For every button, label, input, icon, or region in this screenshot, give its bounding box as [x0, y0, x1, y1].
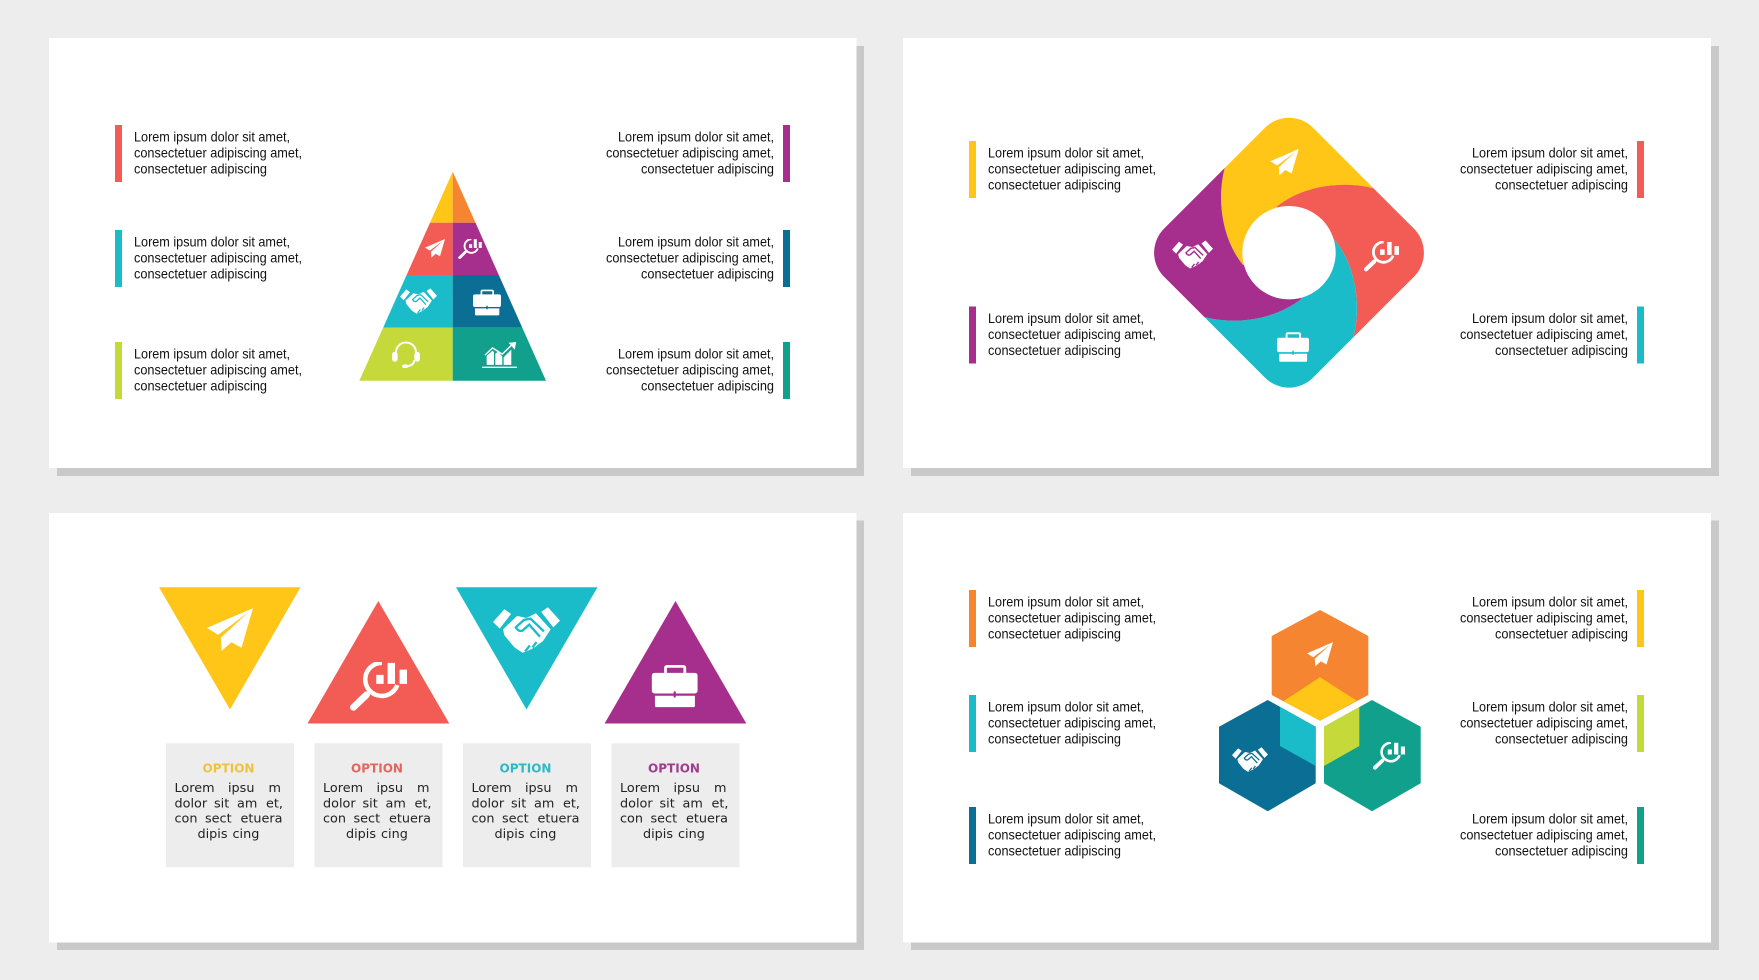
option card 2: [314, 743, 442, 867]
option card 3: cing: [530, 827, 556, 842]
text block: right 1: consectetuer adipiscing amet,: [1460, 162, 1628, 177]
text block: left 1: Lorem ipsum dolor sit amet,: [988, 146, 1144, 161]
option card 3: ipsu: [525, 781, 551, 796]
option card 1: dipis: [198, 827, 228, 842]
text block: left 2: Lorem ipsum dolor sit amet,: [134, 235, 290, 250]
text block: right 1: Lorem ipsum dolor sit amet,: [618, 130, 774, 145]
option card 4: ipsu: [674, 781, 700, 796]
option card 4: m: [714, 781, 726, 796]
option card 3: m: [566, 781, 578, 796]
option card 2: etuera: [389, 811, 431, 826]
text block: right 3: Lorem ipsum dolor sit amet,: [618, 347, 774, 362]
text block: right 2: consectetuer adipiscing amet,: [1460, 327, 1628, 342]
text block: left 2: [969, 695, 1156, 752]
text block: left 2: consectetuer adipiscing amet,: [134, 251, 302, 266]
text block: right 2: consectetuer adipiscing: [641, 267, 774, 282]
text block: left 3: Lorem ipsum dolor sit amet,: [988, 812, 1144, 827]
text block: right 1: Lorem ipsum dolor sit amet,: [1472, 595, 1628, 610]
option card 3: et,: [563, 796, 580, 811]
option card 4: am: [682, 796, 703, 811]
option card 1: [166, 743, 294, 867]
option card 4: OPTION: [648, 761, 700, 775]
option card 4: Lorem: [620, 781, 660, 796]
option card 2: cing: [381, 827, 408, 842]
text block: left 2: Lorem ipsum dolor sit amet,: [988, 311, 1144, 326]
text block: left 1: consectetuer adipiscing: [988, 627, 1121, 642]
option card 1: ipsu: [228, 781, 254, 796]
panel: swirl diamond: [903, 38, 1719, 476]
option card 1: sect: [205, 811, 232, 826]
option card 2: sit: [362, 796, 378, 811]
option card 2: OPTION: [351, 761, 403, 775]
option card 3: sit: [511, 796, 526, 811]
text block: left 2: Lorem ipsum dolor sit amet,: [988, 700, 1144, 715]
text block: right 3: consectetuer adipiscing: [1495, 844, 1628, 859]
swirl diamond chart: [1154, 118, 1424, 388]
option card 1: m: [268, 781, 281, 796]
text block: left 3: Lorem ipsum dolor sit amet,: [134, 347, 290, 362]
text block: right 3: [1460, 807, 1644, 864]
triangle: teal: [456, 587, 598, 710]
text block: right 1: consectetuer adipiscing amet,: [1460, 611, 1628, 626]
option card 1: OPTION: [203, 761, 254, 775]
text block: right 2: [1460, 695, 1644, 752]
text block: left 1: Lorem ipsum dolor sit amet,: [988, 595, 1144, 610]
text block: right 1: consectetuer adipiscing: [641, 162, 774, 177]
text block: right 3: Lorem ipsum dolor sit amet,: [1472, 812, 1628, 827]
text block: left 2: consectetuer adipiscing amet,: [988, 327, 1156, 342]
option card 1: dolor: [174, 796, 208, 811]
text block: right 3: consectetuer adipiscing: [641, 379, 774, 394]
option card 3: sect: [502, 811, 529, 826]
text block: left 2: consectetuer adipiscing: [988, 343, 1121, 358]
option card 4: dolor: [620, 796, 653, 811]
pyramid chart: [359, 172, 546, 381]
text block: left 1: consectetuer adipiscing amet,: [134, 146, 302, 161]
text block: left 2: [115, 230, 302, 287]
triangle: yellow: [159, 587, 300, 710]
text block: left 1: [969, 590, 1156, 647]
option card 2: et,: [414, 796, 431, 811]
text block: right 2: Lorem ipsum dolor sit amet,: [618, 235, 774, 250]
text block: left 3: consectetuer adipiscing: [134, 379, 267, 394]
text block: right 3: consectetuer adipiscing amet,: [606, 363, 774, 378]
text block: right 2: consectetuer adipiscing: [1495, 732, 1628, 747]
option card 4: et,: [712, 796, 728, 811]
option card 3: dipis: [494, 827, 525, 842]
option card 1: cing: [232, 827, 259, 842]
text block: right 2: Lorem ipsum dolor sit amet,: [1472, 311, 1628, 326]
text block: left 2: consectetuer adipiscing: [988, 732, 1121, 747]
option card 3: etuera: [538, 811, 579, 826]
option card 3: OPTION: [500, 761, 551, 775]
text block: right 1: [606, 125, 790, 182]
option card 2: am: [386, 796, 406, 811]
option card 2: ipsu: [376, 781, 403, 796]
option card 3: am: [534, 796, 554, 811]
option card 2: sect: [354, 811, 380, 826]
text block: right 2: consectetuer adipiscing amet,: [1460, 716, 1628, 731]
text block: left 1: Lorem ipsum dolor sit amet,: [134, 130, 290, 145]
triangle: red: [308, 601, 449, 724]
text block: left 3: consectetuer adipiscing amet,: [134, 363, 302, 378]
option card 4: [612, 743, 740, 867]
option card 3: Lorem: [472, 781, 512, 796]
option card 2: Lorem: [323, 781, 363, 796]
option card 1: et,: [266, 796, 283, 811]
text block: left 1: consectetuer adipiscing: [134, 162, 267, 177]
text block: left 2: consectetuer adipiscing amet,: [988, 716, 1156, 731]
text block: left 2: [969, 306, 1156, 364]
option card 3: [463, 743, 591, 867]
text block: right 2: consectetuer adipiscing amet,: [606, 251, 774, 266]
text block: right 1: [1460, 141, 1644, 198]
panel: pyramid: [49, 38, 864, 476]
text block: right 2: consectetuer adipiscing: [1495, 343, 1628, 358]
option card 4: con: [620, 811, 643, 826]
panel: hexagons: [903, 513, 1719, 950]
text block: right 1: [1460, 590, 1644, 647]
text block: left 3: [969, 807, 1156, 864]
text block: right 2: [606, 230, 790, 287]
text block: right 1: consectetuer adipiscing: [1495, 627, 1628, 642]
option card 1: sit: [214, 796, 229, 811]
option card 4: sit: [660, 796, 675, 811]
text block: left 1: consectetuer adipiscing: [988, 178, 1121, 193]
text block: right 3: consectetuer adipiscing amet,: [1460, 828, 1628, 843]
option card 4: cing: [678, 827, 705, 842]
hexagon cluster: [1219, 610, 1421, 811]
panel: triangle options: [49, 513, 864, 950]
option card 1: Lorem: [174, 781, 215, 796]
option card 1: con: [174, 811, 197, 826]
text block: left 1: [969, 141, 1156, 198]
text block: right 1: Lorem ipsum dolor sit amet,: [1472, 146, 1628, 161]
text block: right 2: [1460, 306, 1644, 364]
text block: right 1: consectetuer adipiscing amet,: [606, 146, 774, 161]
option card 1: etuera: [240, 811, 282, 826]
option card 4: sect: [650, 811, 677, 826]
option card 2: dolor: [323, 796, 356, 811]
option card 2: con: [323, 811, 346, 826]
option card 4: dipis: [643, 827, 673, 842]
text block: right 3: [606, 342, 790, 399]
text block: right 1: consectetuer adipiscing: [1495, 178, 1628, 193]
text block: left 1: consectetuer adipiscing amet,: [988, 611, 1156, 626]
text block: left 3: [115, 342, 302, 399]
option card 3: con: [472, 811, 494, 826]
option card 1: am: [237, 796, 257, 811]
option card 2: dipis: [346, 827, 376, 842]
option card 3: dolor: [472, 796, 505, 811]
triangle: purple: [605, 601, 746, 724]
text block: left 1: [115, 125, 302, 182]
text block: right 2: Lorem ipsum dolor sit amet,: [1472, 700, 1628, 715]
text block: left 2: consectetuer adipiscing: [134, 267, 267, 282]
text block: left 3: consectetuer adipiscing: [988, 844, 1121, 859]
option card 4: etuera: [686, 811, 728, 826]
text block: left 1: consectetuer adipiscing amet,: [988, 162, 1156, 177]
text block: left 3: consectetuer adipiscing amet,: [988, 828, 1156, 843]
option card 2: m: [417, 781, 429, 796]
